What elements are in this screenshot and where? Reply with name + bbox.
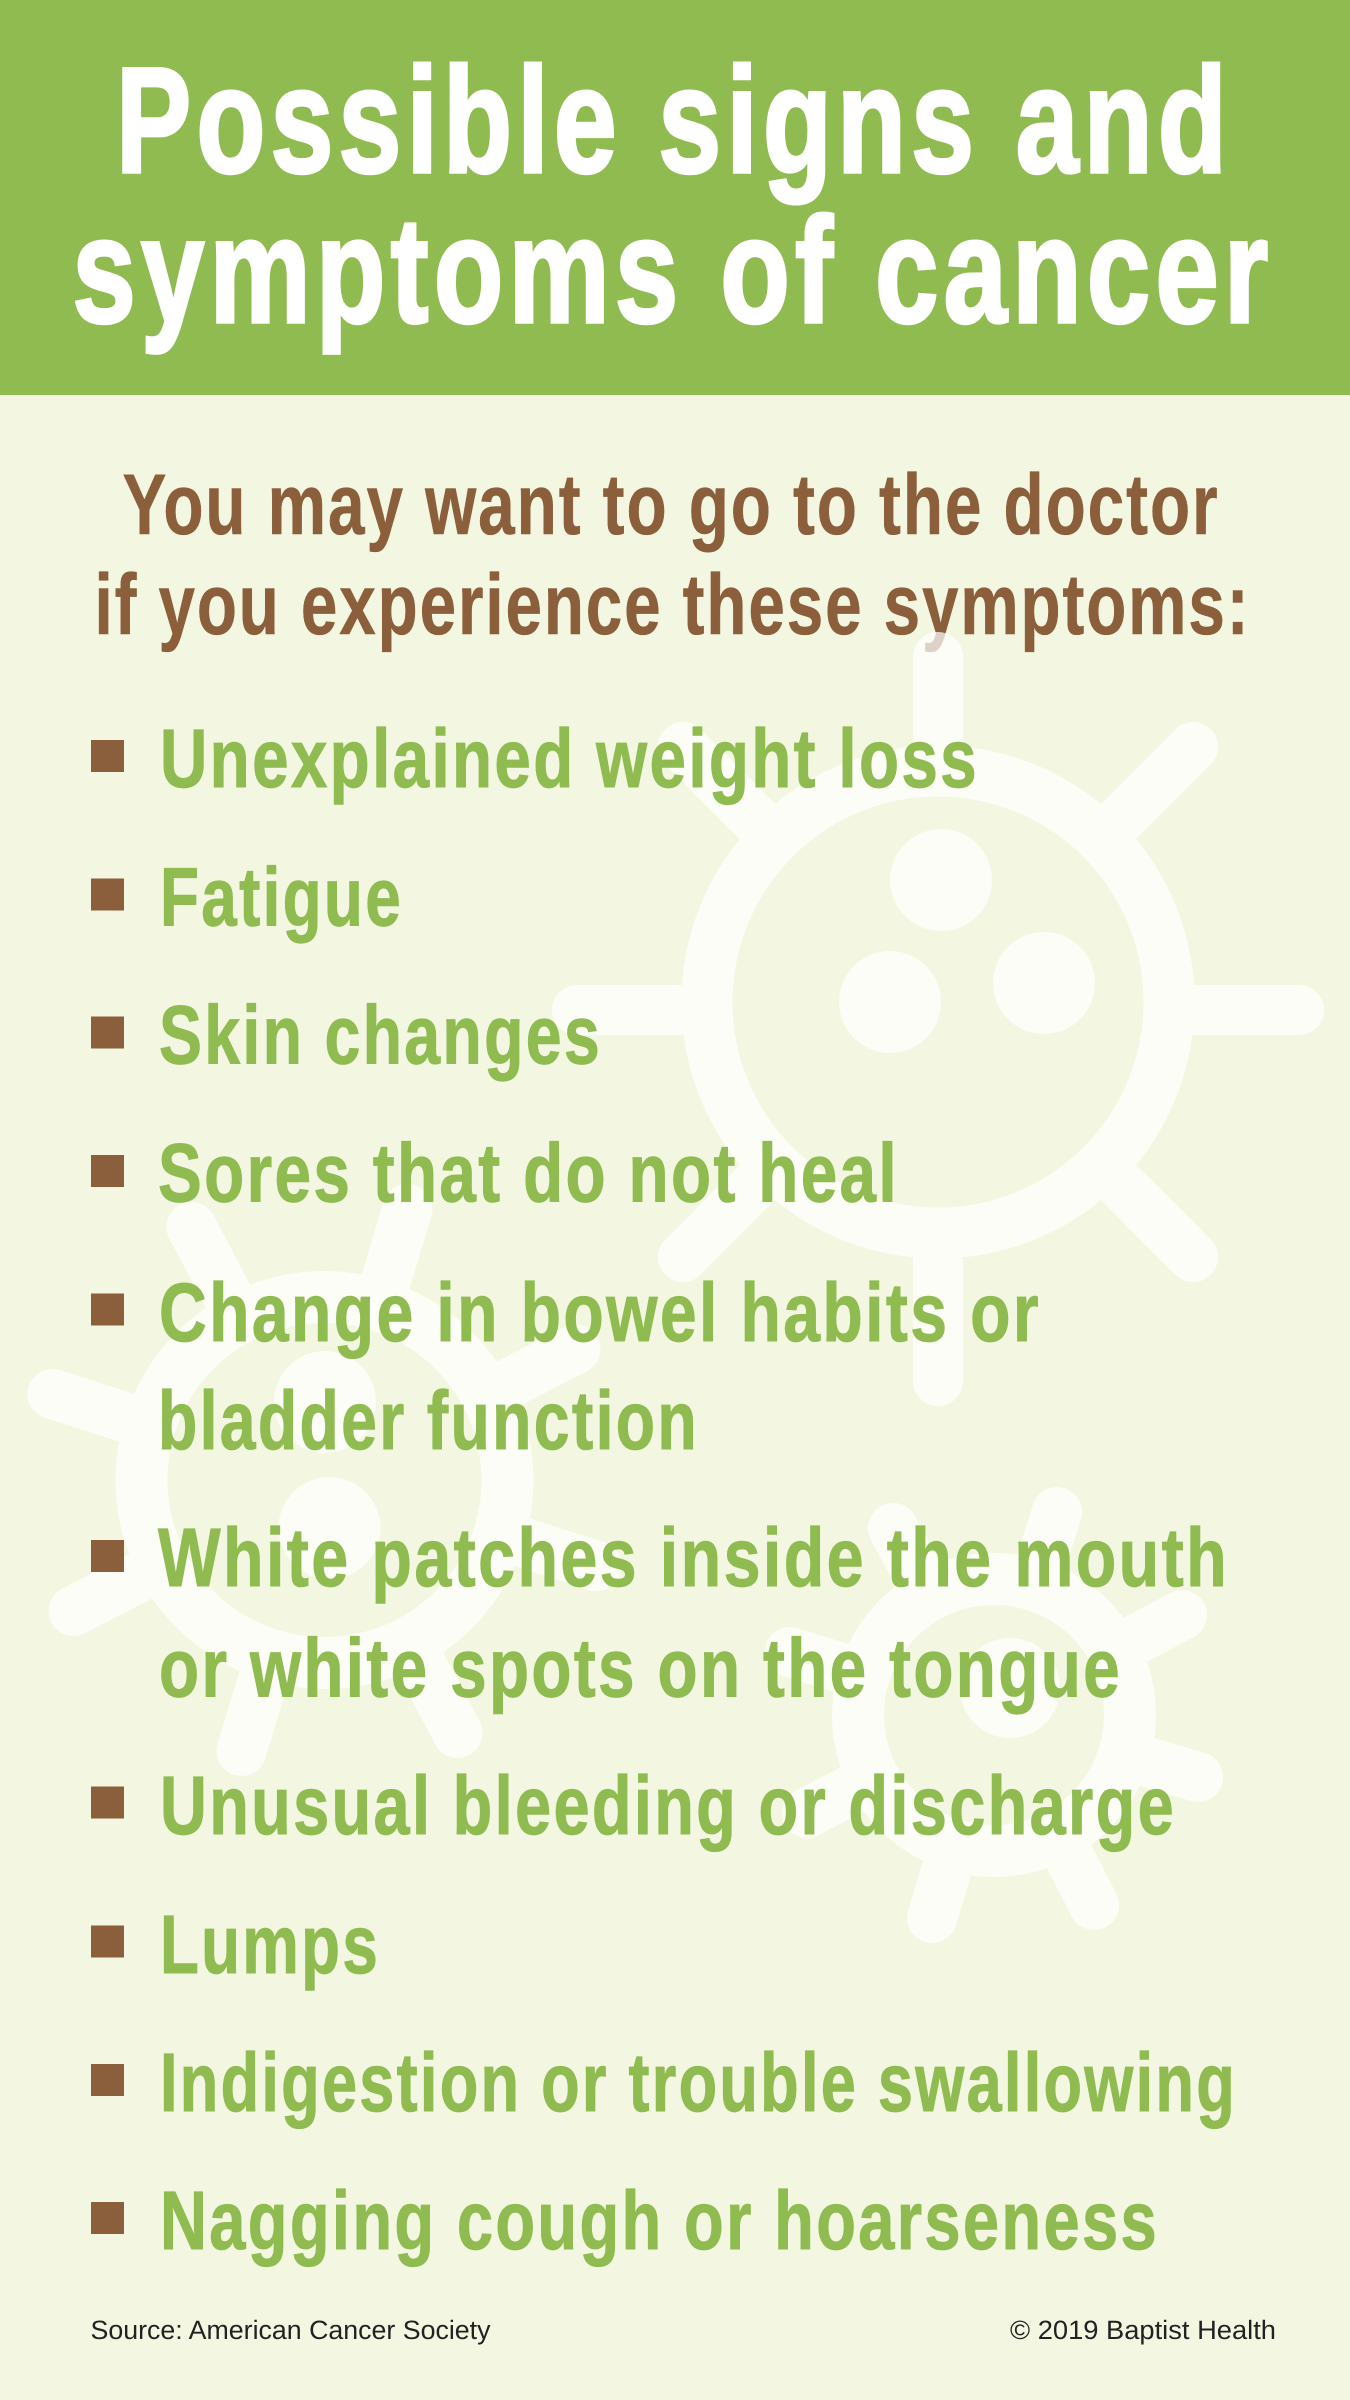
background cell illustrations	[52, 657, 1299, 1918]
icon: left cell	[52, 1209, 596, 1751]
list item: white patches: or white spots on the tongue	[159, 1622, 1122, 1714]
icon: large cell	[577, 657, 1299, 1381]
list item: bowel or bladder: bladder function	[158, 1374, 699, 1467]
list item: skin changes: Skin changes	[159, 988, 602, 1082]
header band	[0, 0, 1350, 395]
list item: unexplained weight loss: Unexplained weight loss	[160, 712, 979, 805]
title	[72, 36, 1274, 354]
subheading	[94, 457, 1250, 653]
list item: bowel or bladder: Change in bowel habits or	[159, 1266, 1041, 1359]
copyright note: © 2019 Baptist Health	[1010, 2315, 1276, 2345]
list item: sores: Sores that do not heal	[158, 1126, 899, 1220]
list item: fatigue: Fatigue	[160, 850, 403, 944]
list item: fatigue	[91, 850, 403, 944]
list item: white patches	[91, 1511, 1229, 1714]
source note: Source: American Cancer Society	[90, 2315, 491, 2345]
list item: lumps	[91, 1898, 380, 1991]
list item: lumps: Lumps	[160, 1898, 380, 1991]
icon: right cell	[790, 1512, 1198, 1918]
list item: skin changes	[91, 988, 602, 1082]
symptom list	[91, 712, 1237, 2267]
list item: bowel or bladder	[91, 1266, 1041, 1467]
